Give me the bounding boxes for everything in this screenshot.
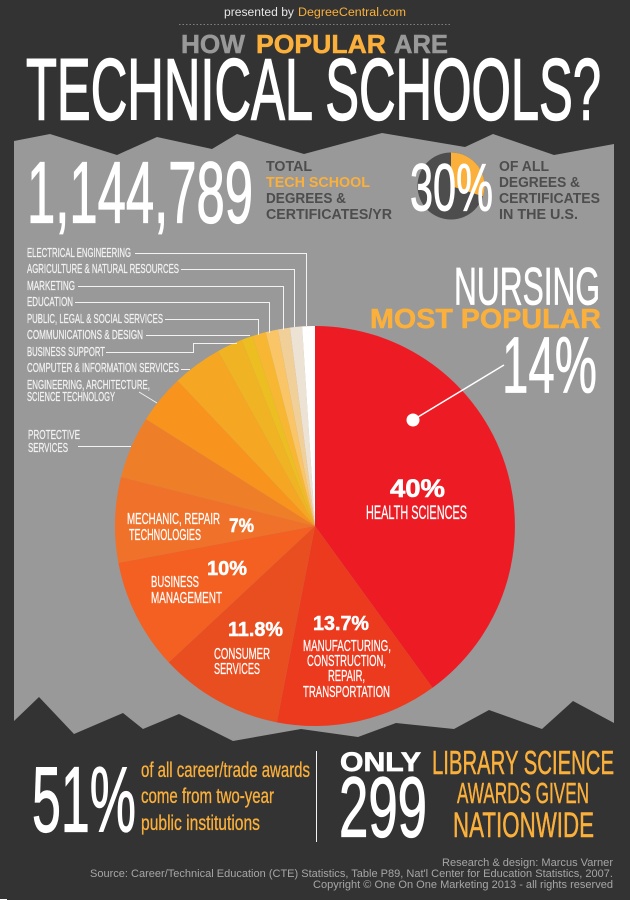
pie labels: 13.7% xyxy=(313,613,369,635)
stat: 51 percent: of all career/trade awards xyxy=(141,759,310,782)
icon: small pie xyxy=(418,152,485,220)
category labels with leader lines: ENGINEERING, ARCHITECTURE, xyxy=(27,377,150,392)
heading: how popular are xyxy=(181,31,448,59)
stat: total degrees: 1,144,789 xyxy=(27,144,253,242)
pie labels xyxy=(127,475,467,701)
heading: how popular are: ARE xyxy=(394,31,448,59)
pie labels: CONSUMER xyxy=(214,646,270,663)
heading: how popular are: POPULAR xyxy=(256,31,386,59)
category labels with leader lines: PROTECTIVE xyxy=(28,427,80,442)
pie labels: HEALTH SCIENCES xyxy=(366,503,467,524)
stat: total degrees: TECH SCHOOL xyxy=(266,175,370,191)
pie labels: SERVICES xyxy=(214,661,260,678)
footer credits xyxy=(90,857,613,891)
category labels with leader lines: ELECTRICAL ENGINEERING xyxy=(27,245,131,260)
category labels with leader lines: COMMUNICATIONS & DESIGN xyxy=(27,327,143,342)
stat: 30 percent with pie: OF ALL xyxy=(499,159,549,175)
stat: 30 percent with pie: 30% xyxy=(410,150,493,226)
category labels with leader lines: EDUCATION xyxy=(27,294,73,309)
category labels with leader lines xyxy=(27,245,306,455)
category labels with leader lines: PUBLIC, LEGAL & SOCIAL SERVICES xyxy=(27,311,163,326)
footer credits: Research & design: Marcus Varner xyxy=(442,857,613,869)
pie labels: CONSTRUCTION, xyxy=(307,653,386,670)
stat: 51 percent xyxy=(32,748,310,852)
category labels with leader lines: BUSINESS SUPPORT xyxy=(27,344,105,359)
pie labels: MECHANIC, REPAIR xyxy=(127,511,220,528)
pie labels: 40% xyxy=(390,475,445,503)
presented by line: presented by xyxy=(224,7,294,19)
stat: total degrees: CERTIFICATES/YR xyxy=(266,207,393,223)
footer credits: Source: Career/Technical Education (CTE) Statistics, Table P89, Nat'l Center for Education Statistics, 2007. xyxy=(90,868,613,880)
pie labels: BUSINESS xyxy=(151,574,199,591)
stat: 51 percent: public institutions xyxy=(141,812,260,835)
pie labels: TECHNOLOGIES xyxy=(129,527,201,544)
stat: only 299 library science: ONLY xyxy=(340,747,421,777)
callout: nursing most popular: MOST POPULAR xyxy=(370,303,601,334)
footer credits: Copyright © One On One Marketing 2013 - all rights reserved xyxy=(313,879,613,891)
heading: how popular are: HOW xyxy=(181,31,246,59)
presented by line xyxy=(224,7,406,19)
category labels with leader lines: MARKETING xyxy=(27,278,75,293)
title xyxy=(26,31,601,138)
pie labels: 10% xyxy=(207,558,247,580)
category labels with leader lines: AGRICULTURE & NATURAL RESOURCES xyxy=(27,261,179,276)
pie labels: MANAGEMENT xyxy=(151,590,222,607)
stat: 30 percent with pie: DEGREES & xyxy=(499,175,580,191)
callout: nursing most popular xyxy=(370,258,601,426)
stat: total degrees: TOTAL xyxy=(266,159,312,175)
stat: 51 percent: come from two-year xyxy=(141,785,274,808)
category labels with leader lines: SERVICES xyxy=(28,440,68,455)
pie labels: MANUFACTURING, xyxy=(303,638,391,655)
pie labels: 7% xyxy=(229,516,254,537)
stat: 30 percent with pie: IN THE U.S. xyxy=(499,207,578,223)
pie labels: 11.8% xyxy=(228,619,283,641)
stat: 51 percent: 51% xyxy=(32,748,136,852)
category labels with leader lines: COMPUTER & INFORMATION SERVICES xyxy=(27,360,179,375)
presented by line: DegreeCentral.com xyxy=(298,7,406,19)
pie labels: TRANSPORTATION xyxy=(303,684,390,701)
panel: grey torn-edge background xyxy=(14,133,614,741)
pie chart: degrees by field xyxy=(115,326,515,726)
stat: only 299 library science xyxy=(339,744,614,856)
stat: 30 percent with pie: CERTIFICATES xyxy=(499,191,600,207)
stat: total degrees: DEGREES & xyxy=(266,191,346,207)
stat: only 299 library science: 299 xyxy=(339,760,427,856)
category labels with leader lines: SCIENCE TECHNOLOGY xyxy=(27,389,115,404)
pie labels: REPAIR, xyxy=(328,668,365,685)
